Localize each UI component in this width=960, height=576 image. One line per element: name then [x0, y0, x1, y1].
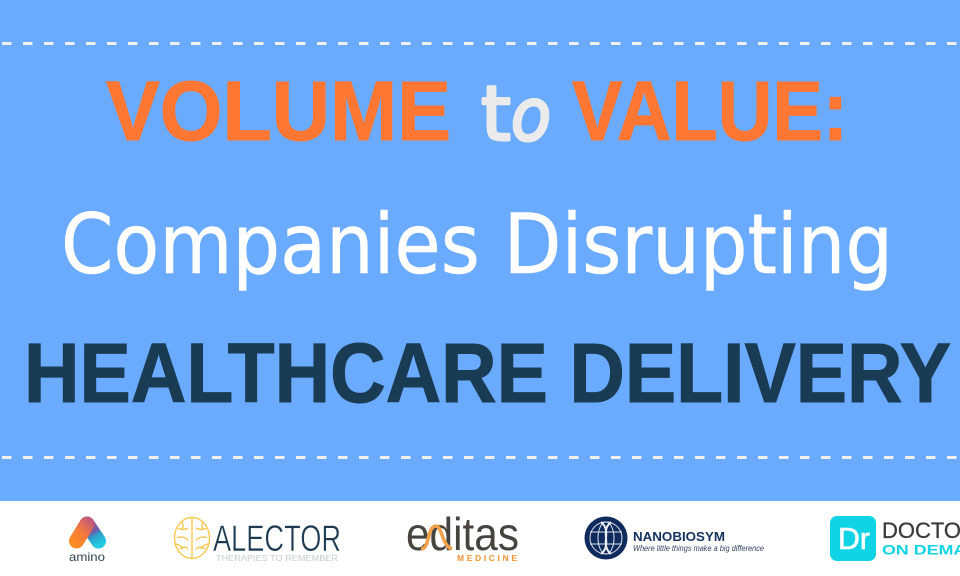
- title line 1: Volume to Value: t: [481, 69, 511, 158]
- title line 1: Volume to Value: VOLUME: [106, 64, 451, 158]
- title line 1: Volume to Value: o: [511, 73, 551, 157]
- logo: amino: [69, 524, 105, 564]
- logo strip background: [0, 501, 960, 576]
- logo: Nanobiosym: Where little things make a big difference: [633, 544, 765, 553]
- logo: Alector: THERAPIES TO REMEMBER: [216, 554, 338, 563]
- logo: Doctor on Demand: Dr: [838, 521, 870, 556]
- title line 1: Volume to Value: VALUE:: [572, 64, 848, 158]
- logo: Alector: ALECTOR: [213, 518, 341, 559]
- logo: Alector: [174, 518, 341, 563]
- logo: Nanobiosym: NANOBIOSYM: [633, 529, 725, 544]
- logo: Doctor on Demand: [830, 516, 960, 561]
- logo: Nanobiosym: [584, 516, 765, 560]
- title line 2: Companies Disrupting: Companies Disrupting: [61, 196, 893, 293]
- title line 1: Volume to Value: [106, 64, 848, 158]
- logo: amino: amino: [69, 550, 105, 564]
- logo: Editas Medicine: editas: [406, 508, 519, 560]
- logo: Editas Medicine: MEDICINE: [457, 553, 517, 563]
